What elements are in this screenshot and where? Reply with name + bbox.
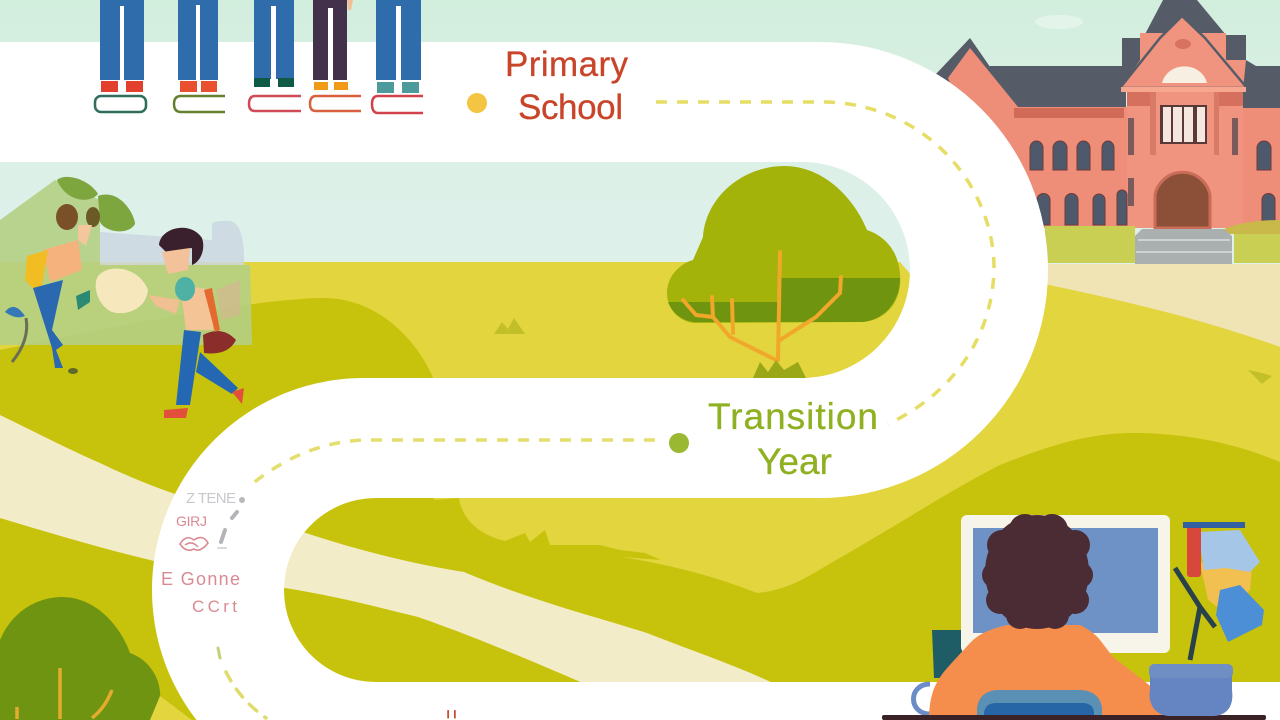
small grass tufts <box>494 318 1272 560</box>
heading: Transition Year: Transition <box>708 396 878 437</box>
main window <box>1160 105 1207 144</box>
heading: Transition Year: Year <box>757 441 832 482</box>
dashed route: primary to transition <box>656 102 994 424</box>
monitor <box>961 515 1170 653</box>
chair <box>977 690 1102 717</box>
mug behind <box>932 630 962 678</box>
background: meadow <box>0 262 1280 720</box>
dirt path: lower meadow <box>0 415 775 684</box>
background: sky <box>0 0 1280 300</box>
heading: Primary School <box>505 45 628 127</box>
right child <box>148 228 244 418</box>
student 4 <box>310 0 361 111</box>
ball <box>96 268 148 313</box>
colourful flag artwork <box>1183 522 1264 642</box>
tree: right-centre <box>667 166 900 378</box>
illustration: five students standing on books <box>95 0 423 113</box>
illustration: school building <box>936 0 1280 264</box>
sweater <box>929 625 1166 716</box>
upper windows <box>1030 141 1271 170</box>
side slits <box>1128 118 1238 206</box>
student 5 <box>372 0 423 113</box>
lawn and steps <box>1045 226 1135 263</box>
gable ornament <box>1175 39 1191 49</box>
tree leaves <box>57 177 98 200</box>
dot: primary school marker <box>467 93 487 113</box>
cloud <box>1035 15 1083 29</box>
desk lamp <box>1175 568 1215 660</box>
desk <box>882 715 1266 720</box>
gable edge <box>1120 16 1247 88</box>
student 1 <box>95 0 146 112</box>
pot <box>1150 666 1232 716</box>
tower <box>1121 33 1246 228</box>
lower windows <box>1037 190 1275 225</box>
heading: Primary School: School <box>518 88 623 127</box>
roof <box>936 0 1280 108</box>
illustration: two children playing <box>0 177 252 418</box>
heading: Primary School: Primary <box>505 45 628 84</box>
blurred label text with icon: Z TENE <box>186 490 236 507</box>
dirt path: right side <box>1040 264 1280 347</box>
blurred label text with icon: E Gonne <box>161 569 240 589</box>
cornice <box>1014 108 1124 118</box>
heading: Transition Year <box>708 396 878 482</box>
door <box>1155 172 1210 228</box>
blurred label text with icon: GIRJ <box>176 513 207 529</box>
blurred label text with icon <box>161 490 240 616</box>
illustration: student at computer <box>882 514 1266 720</box>
blurred label text with icon: C C r t <box>192 597 237 616</box>
icon: open book sketch <box>180 538 208 550</box>
student 2 <box>174 0 225 112</box>
student 3 <box>249 0 301 111</box>
dashed route: transition to next <box>252 440 655 484</box>
top window <box>1162 66 1207 83</box>
walls <box>948 48 1127 228</box>
left child <box>5 204 100 374</box>
tree: bottom-left <box>0 597 192 720</box>
hair <box>982 514 1093 629</box>
dot: transition marker <box>669 433 689 453</box>
faded backdrop hill <box>0 180 252 345</box>
dashed route: faded segment <box>218 497 266 718</box>
